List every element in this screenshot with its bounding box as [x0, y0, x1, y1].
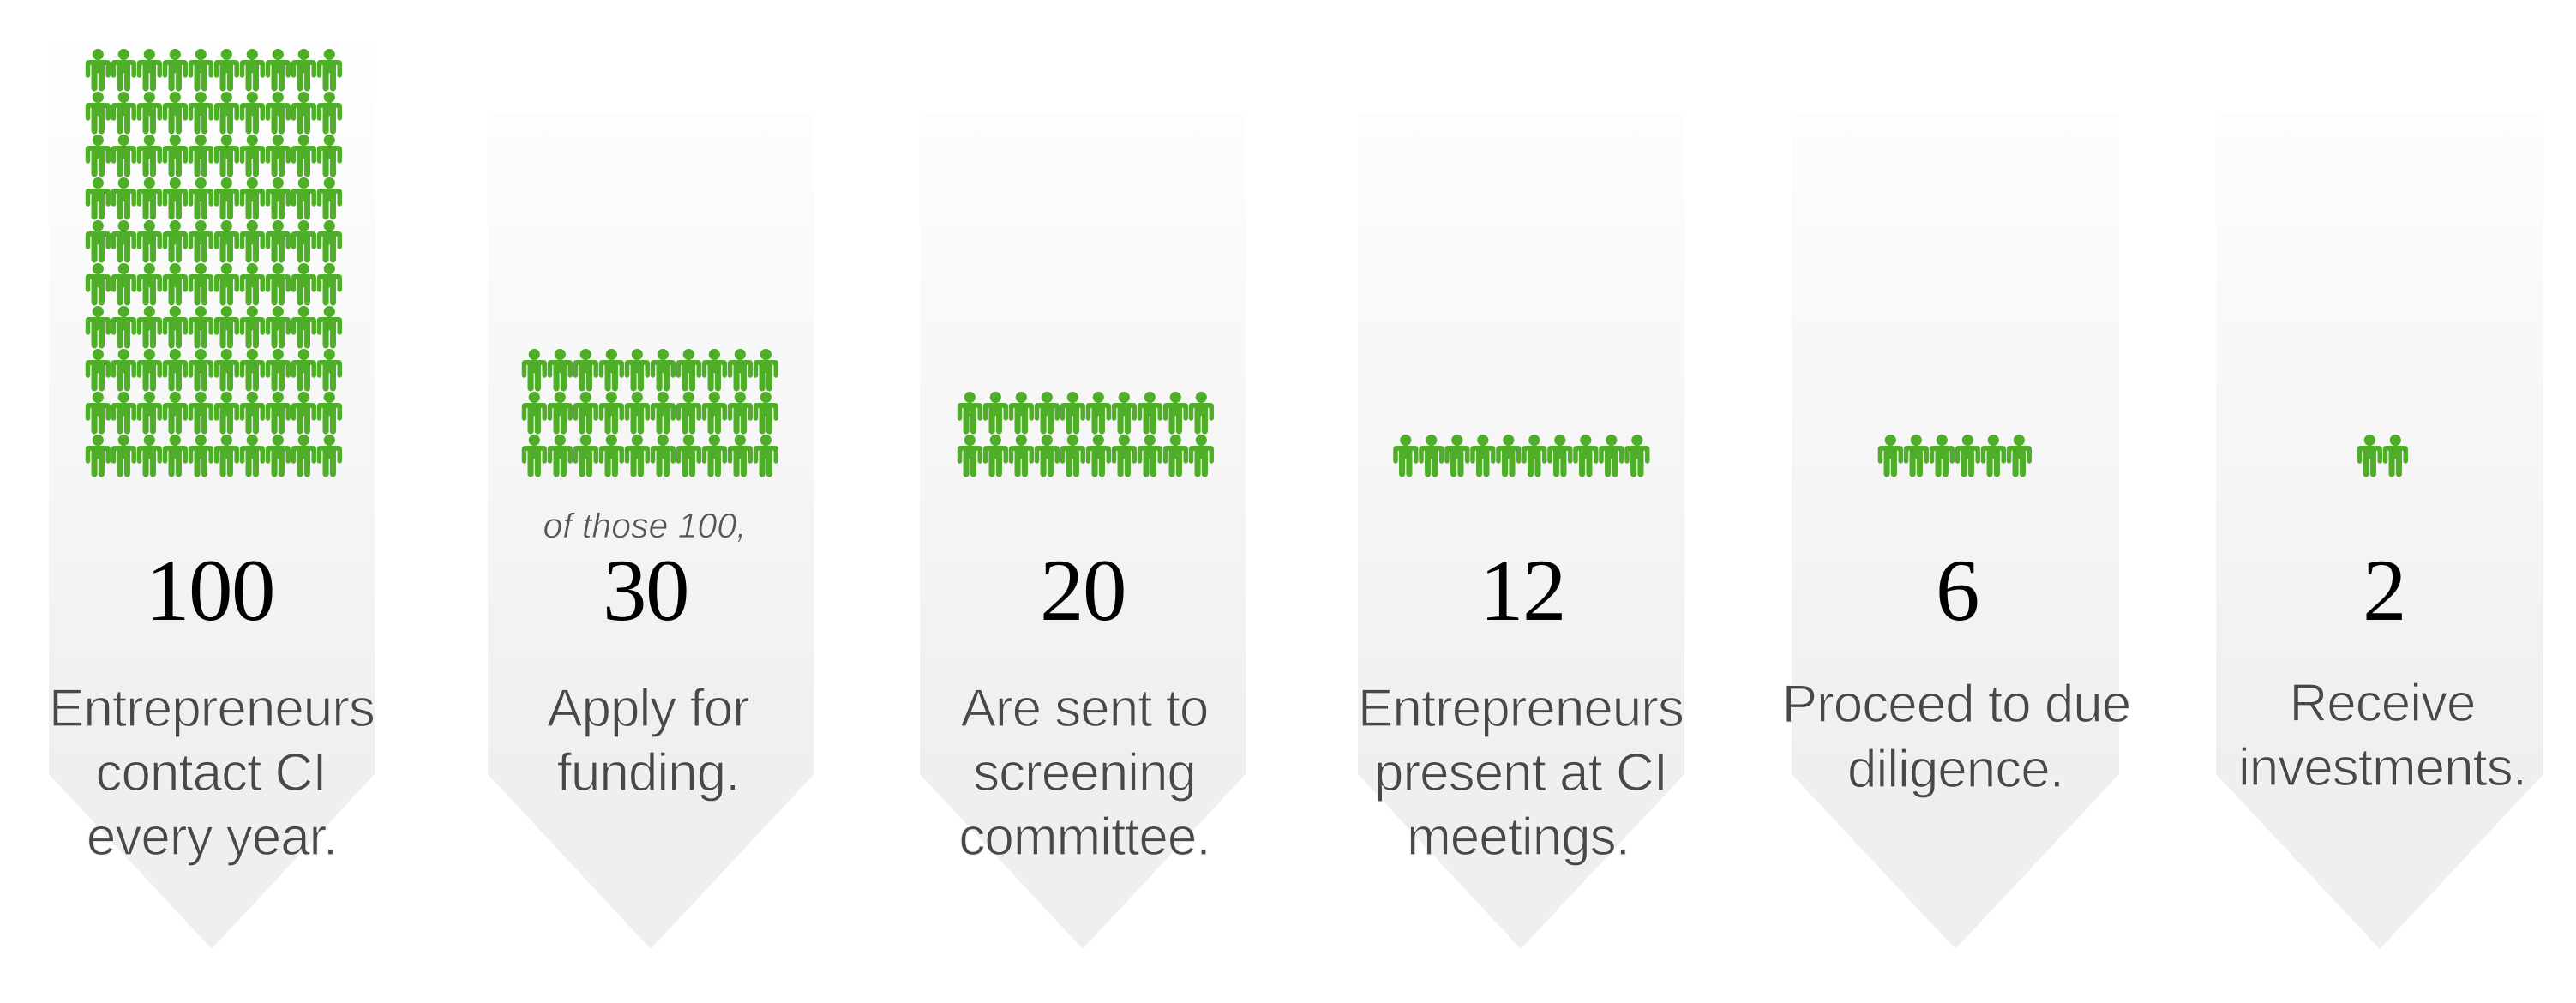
arrow banner 1	[49, 41, 375, 949]
arrow banner 3	[920, 112, 1246, 949]
arrow banner 5	[1792, 112, 2119, 949]
label: sent to screening committee: Are sent to	[961, 679, 1208, 738]
caption: of those 100: of those 100,	[543, 506, 747, 545]
number: 100: 100	[146, 542, 274, 640]
label: entrepreneurs contact CI	[49, 679, 375, 867]
label: present at CI meetings: meetings.	[1407, 808, 1630, 867]
arrow banner 4	[1358, 112, 1684, 949]
label: entrepreneurs contact CI: Entrepreneurs	[49, 679, 375, 738]
number: 6: 6	[1936, 542, 1979, 640]
label: proceed to due diligence	[1782, 675, 2130, 799]
panel: 30 apply	[488, 112, 814, 949]
label: proceed to due diligence: diligence.	[1847, 740, 2063, 799]
label: entrepreneurs contact CI: every year.	[87, 808, 337, 867]
panel: 6 due diligence	[1782, 112, 2130, 949]
label: entrepreneurs contact CI: contact CI	[95, 743, 327, 802]
number: 20: 20	[1040, 542, 1126, 640]
panel: 2 investments	[2216, 112, 2543, 949]
label: receive investments: Receive	[2289, 674, 2476, 733]
panel: 20 screening	[920, 112, 1246, 949]
number: 12: 12	[1480, 542, 1565, 640]
label: sent to screening committee: screening	[973, 743, 1196, 802]
icon: 30 people	[522, 349, 778, 477]
number: 30: 30	[603, 542, 688, 640]
label: sent to screening committee	[958, 679, 1210, 867]
icon: 2 people	[2357, 435, 2408, 477]
label: apply for funding: Apply for	[547, 679, 749, 738]
panel: 100 entrepreneurs	[49, 41, 375, 949]
label: apply for funding	[547, 679, 749, 802]
arrow banner 2	[488, 112, 814, 949]
icon: 6 people	[1878, 435, 2032, 477]
label: receive investments	[2238, 674, 2526, 797]
label: sent to screening committee: committee.	[958, 808, 1210, 867]
label: present at CI meetings: present at CI	[1374, 743, 1667, 802]
icon: 10 people	[1394, 435, 1649, 477]
label: receive investments: investments.	[2238, 738, 2526, 797]
label: proceed to due diligence: Proceed to due	[1782, 675, 2130, 734]
label: present at CI meetings	[1358, 679, 1684, 867]
arrow banner 6	[2216, 112, 2543, 949]
icon: 20 people	[958, 392, 1214, 477]
number: 2: 2	[2363, 542, 2405, 640]
panel: 12 present	[1358, 112, 1684, 949]
label: apply for funding: funding.	[557, 743, 739, 802]
label: present at CI meetings: Entrepreneurs	[1358, 679, 1684, 738]
icon: 100 people	[86, 49, 342, 477]
